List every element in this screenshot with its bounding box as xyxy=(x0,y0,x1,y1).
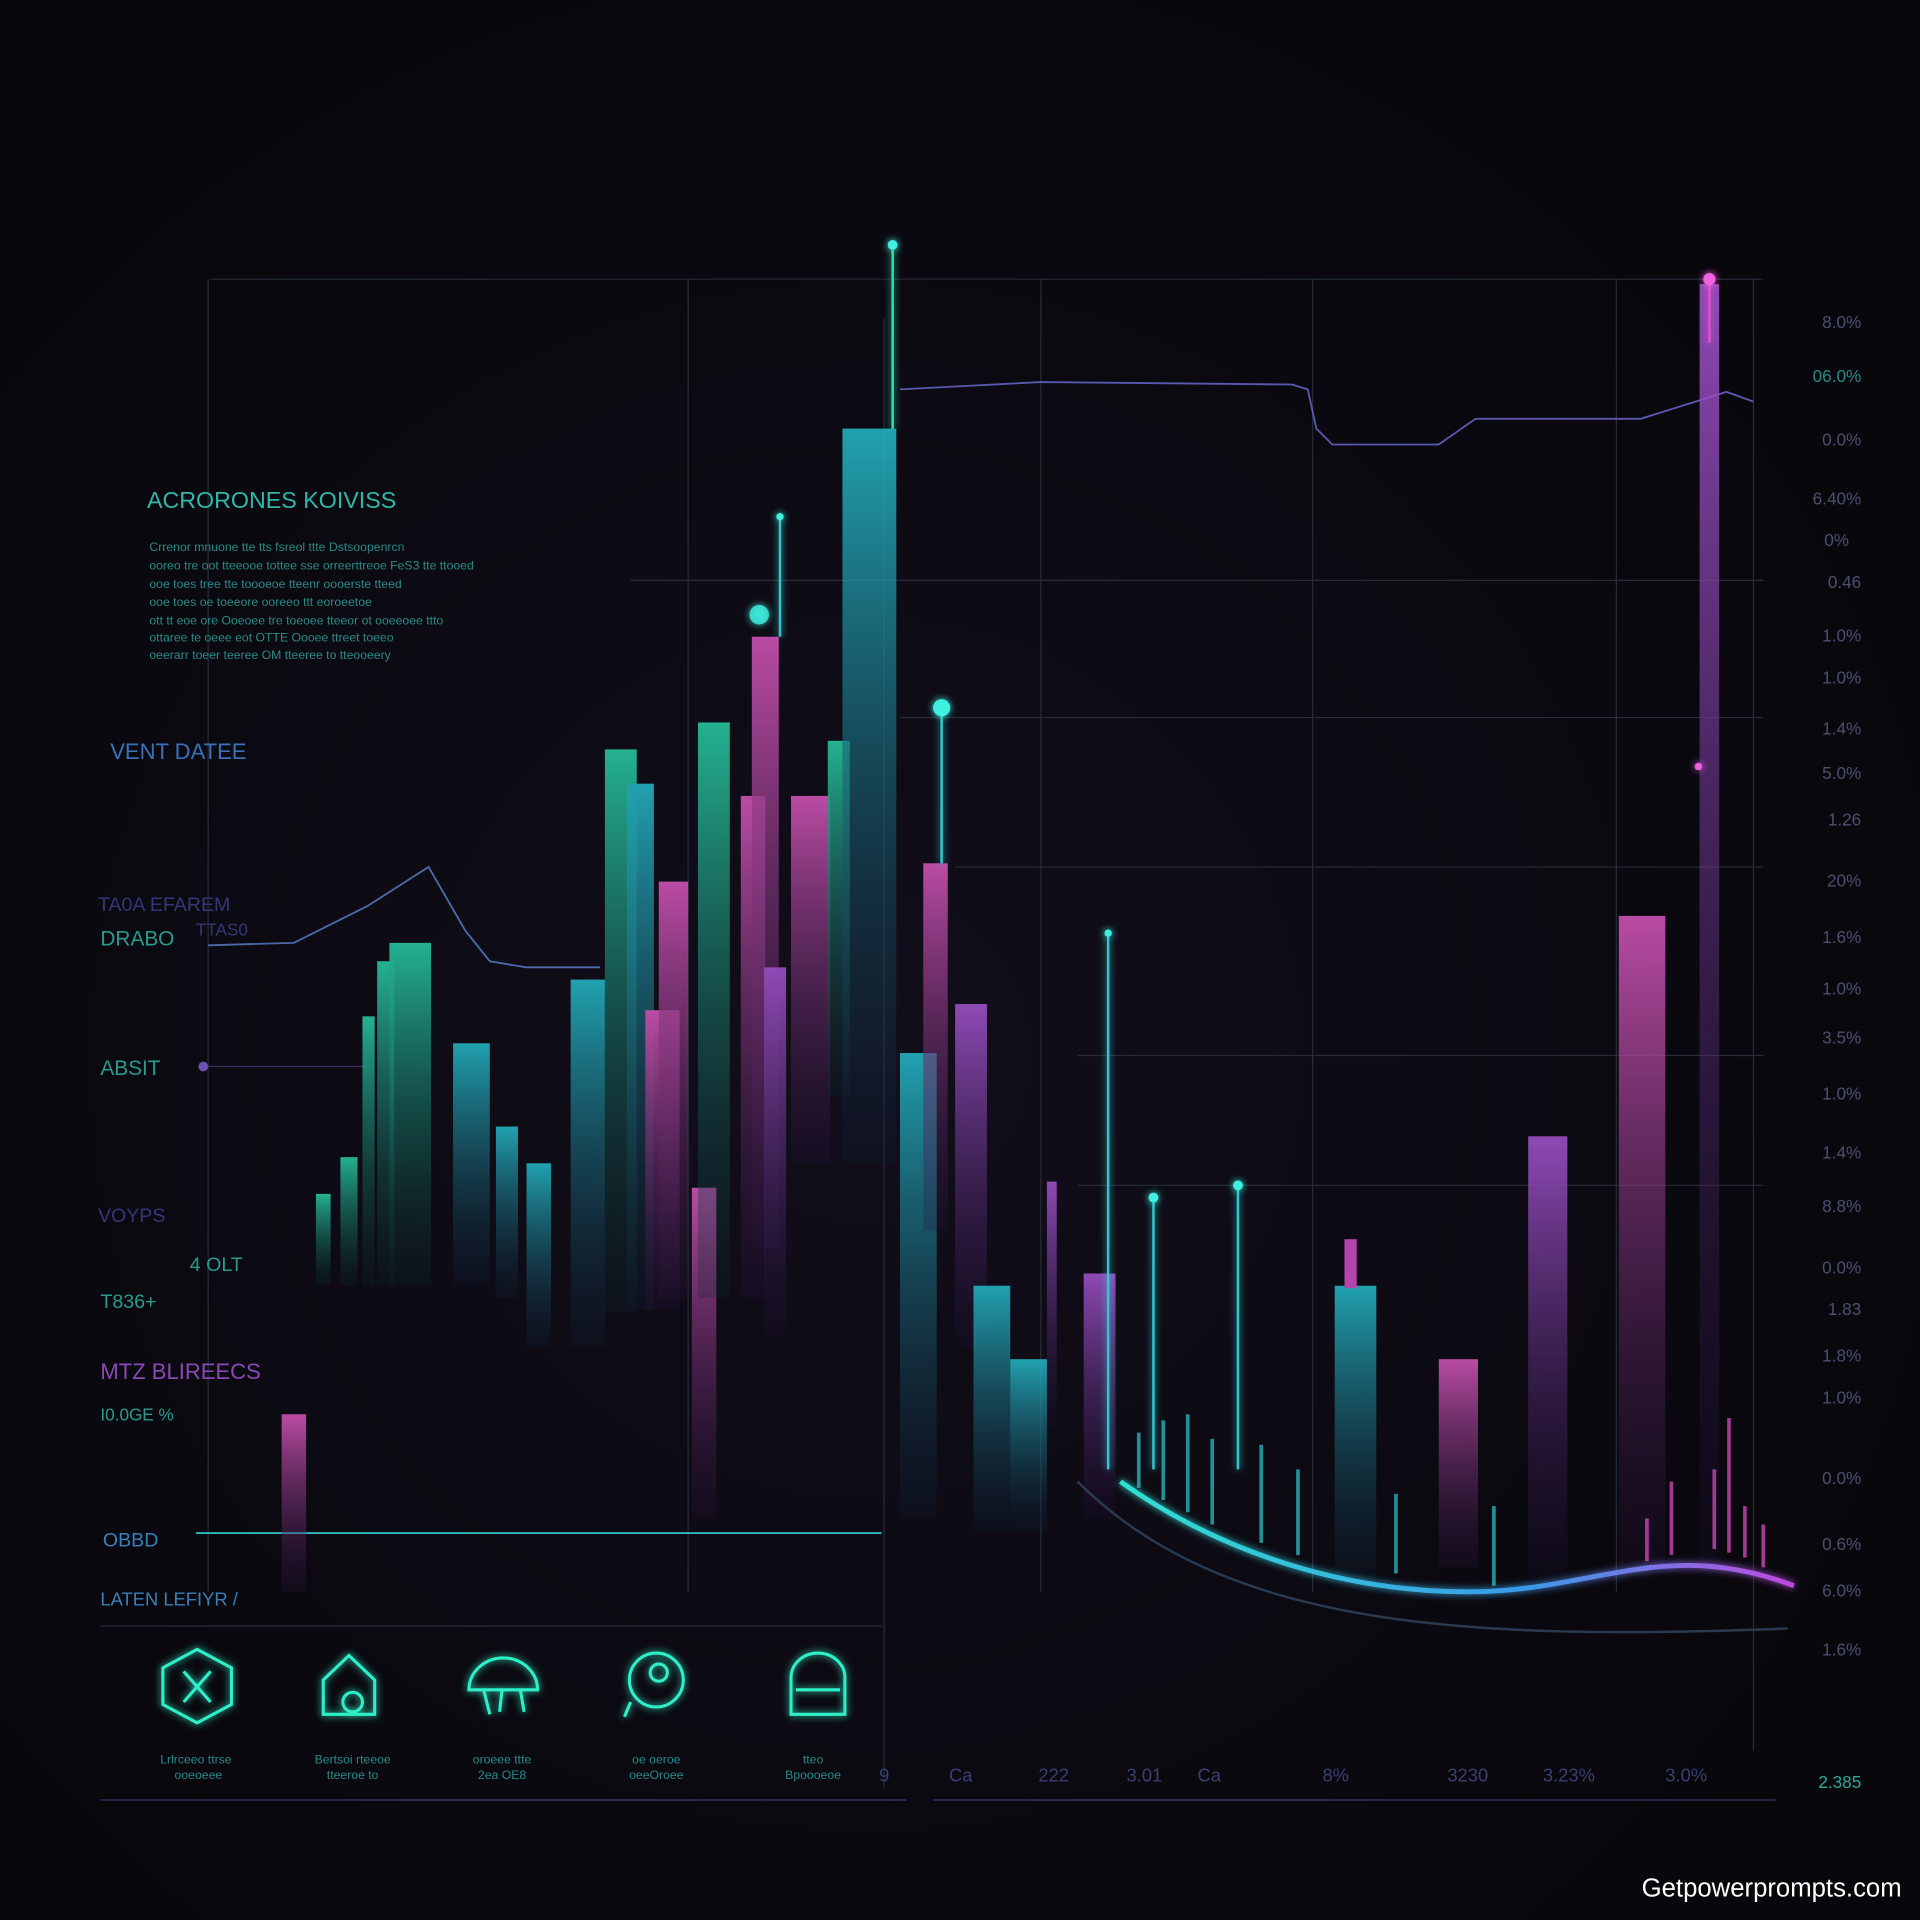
right axis labels: 8.8% xyxy=(1822,1196,1861,1216)
bars right xyxy=(1335,284,1719,1580)
right axis labels: 0.0% xyxy=(1822,1257,1861,1277)
right axis labels: 1.0% xyxy=(1822,1387,1861,1407)
bottom axis labels xyxy=(879,1765,1707,1786)
right axis labels: 2.385 xyxy=(1818,1772,1861,1792)
right axis labels: 1.83 xyxy=(1828,1299,1861,1319)
right axis labels: 06.0% xyxy=(1813,366,1861,386)
side labels: VENT DATEE xyxy=(110,739,247,764)
side labels: DRABO xyxy=(100,927,174,950)
right axis labels: 1.8% xyxy=(1822,1346,1861,1366)
right axis labels: 1.4% xyxy=(1822,1142,1861,1162)
bottom axis labels: 3230 xyxy=(1447,1765,1488,1786)
right axis labels: 1.4% xyxy=(1822,719,1861,739)
side labels: OBBD xyxy=(103,1530,158,1552)
text: ooeoeee xyxy=(175,1768,222,1782)
right axis labels xyxy=(1813,312,1861,1792)
bottom axis labels: Ca xyxy=(949,1765,973,1786)
text: oroeee ttte xyxy=(473,1752,531,1766)
side labels: VOYPS xyxy=(98,1205,165,1227)
right axis labels: 5.0% xyxy=(1822,763,1861,783)
text: tteeroe to xyxy=(327,1768,379,1782)
description text block: ooe toes tree tte toooeoe tteenr oooerste tteed xyxy=(149,577,402,591)
right axis labels: 8.0% xyxy=(1822,312,1861,332)
description text block: ooe toes oe toeeore ooreeo ttt eoroeetoe xyxy=(149,595,372,609)
bottom axis labels: 3.01 xyxy=(1127,1765,1162,1786)
icon: dome xyxy=(469,1658,538,1714)
description text block xyxy=(149,540,474,662)
right axis labels: 1.0% xyxy=(1822,978,1861,998)
text: 2ea OE8 xyxy=(478,1768,526,1782)
bottom axis labels: 222 xyxy=(1038,1765,1069,1786)
right axis labels: 0.6% xyxy=(1822,1534,1861,1554)
side labels: TTAS0 xyxy=(196,920,248,940)
side labels: TA0A EFAREM xyxy=(98,894,230,916)
text: oeeOroee xyxy=(629,1768,684,1782)
side labels: 4 OLT xyxy=(190,1254,243,1276)
bottom axis labels: 8% xyxy=(1322,1765,1349,1786)
text: oe oeroe xyxy=(632,1752,681,1766)
right axis labels: 0.0% xyxy=(1822,1468,1861,1488)
description text block: Crrenor mnuone tte tts fsreol ttte Dstsoopenrcn xyxy=(149,540,405,554)
right axis labels: 0.0% xyxy=(1822,430,1861,450)
description text block: ott tt eoe ore Ooeoee tre toeoee tteeor ot ooeeoee ttto xyxy=(149,613,443,627)
description text block: oeerarr toeer teeree OM tteeree to tteooeery xyxy=(149,648,392,662)
description text block: ooreo tre oot tteeooe tottee sse orreerttreoe FeS3 tte ttooed xyxy=(149,558,474,572)
icon: helmet xyxy=(791,1653,845,1714)
side labels xyxy=(98,739,261,1609)
icon: house xyxy=(323,1656,375,1714)
icon: hexagon xyxy=(163,1649,231,1723)
right axis labels: 1.0% xyxy=(1822,626,1861,646)
bottom axis labels: 9 xyxy=(879,1765,889,1786)
right axis labels: 1.6% xyxy=(1822,927,1861,947)
side labels: I0.0GE % xyxy=(100,1404,174,1424)
bars left cluster xyxy=(282,943,551,1592)
wave line xyxy=(1120,1482,1794,1592)
text: Bertsoi rteeoe xyxy=(315,1752,391,1766)
right axis labels: 1.6% xyxy=(1822,1640,1861,1660)
right axis labels: 1.0% xyxy=(1822,667,1861,687)
icon: head xyxy=(624,1653,683,1717)
watermark: Getpowerprompts.com xyxy=(1642,1875,1902,1903)
right axis labels: 1.0% xyxy=(1822,1084,1861,1104)
right axis labels: 6.0% xyxy=(1822,1581,1861,1601)
side labels: MTZ BLIREECS xyxy=(100,1359,261,1384)
text: Lrlrceeo ttrse xyxy=(160,1752,232,1766)
side labels: LATEN LEFIYR / xyxy=(100,1588,239,1609)
bottom axis labels: 3.0% xyxy=(1665,1765,1707,1786)
text: Bpoooeoe xyxy=(785,1768,841,1782)
right axis labels: 0.46 xyxy=(1828,572,1861,592)
small spike field xyxy=(1139,1414,1494,1586)
top line chart xyxy=(900,382,1753,444)
side labels: T836+ xyxy=(100,1291,156,1313)
right axis labels: 0% xyxy=(1824,530,1849,550)
bars central cluster xyxy=(571,429,1116,1531)
icons row xyxy=(163,1649,845,1723)
right axis labels: 3.5% xyxy=(1822,1027,1861,1047)
description text block: ottaree te oeee eot OTTE Oooee ttreet toeeo xyxy=(149,631,394,645)
spikes xyxy=(780,245,1709,1469)
side labels: ABSIT xyxy=(100,1057,161,1080)
right axis labels: 6.40% xyxy=(1813,488,1861,508)
bottom axis labels: 3.23% xyxy=(1543,1765,1595,1786)
bottom axis labels: Ca xyxy=(1198,1765,1222,1786)
left line chart xyxy=(208,867,600,967)
right axis labels: 1.26 xyxy=(1828,809,1861,829)
right axis labels: 20% xyxy=(1827,871,1861,891)
title: ACRORONES KOIVISS xyxy=(147,487,396,513)
text: tteo xyxy=(803,1752,823,1766)
